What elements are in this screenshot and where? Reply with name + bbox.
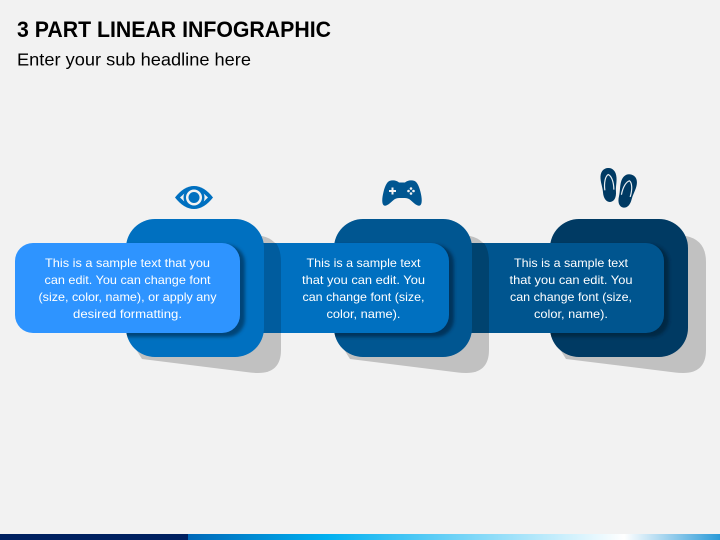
icon: game controller [382,180,422,206]
panel: step 2 [264,219,489,373]
text: step 3 [510,256,632,321]
text: step 2: This is a sample text [306,256,421,270]
square: step 1 [126,219,264,357]
shadow: step 2 square [338,236,489,373]
connector band: step 2 [250,243,420,333]
card shadow: step 3 [550,244,670,338]
panel: step 1 [15,219,281,373]
text: step 1: (size, color, name), or apply any [38,290,216,304]
square: step 2 [334,219,472,357]
panel: step 3 [510,219,706,373]
square: step 3 [550,219,688,357]
subtitle: Enter your sub headline here [17,50,251,70]
shadow: step 3 square [554,236,706,373]
text: step 1: This is a sample text that you [45,256,210,270]
text: step 1 [38,256,216,321]
footer bar [0,534,720,540]
title: 3 PART LINEAR INFOGRAPHIC [17,17,331,42]
text: step 2 [302,256,425,321]
text: step 1: desired formatting. [73,307,182,321]
text: step 3: can change font (size, [510,290,632,304]
icon: eye [175,186,213,209]
card: step 2 [264,243,449,333]
text: step 2: can change font (size, [302,290,424,304]
text: step 3: This is a sample text [514,256,629,270]
text: step 3: that you can edit. You [510,273,632,287]
card: step 1 [15,243,240,333]
text: step 3: color, name). [534,307,608,321]
shadow: step 1 square [130,236,281,373]
step 1 shadow edge over band [264,243,281,333]
step 2 shadow edge over band [472,243,489,333]
card shadow: step 1 [126,243,247,339]
text: step 1: can edit. You can change font [44,273,211,287]
icon: flip flops [600,167,639,209]
text: step 2: color, name). [326,307,400,321]
card: step 3 [472,243,664,333]
card shadow: step 2 [334,244,456,338]
text: step 2: that you can edit. You [302,273,425,287]
connector band: step 3 [460,243,630,333]
